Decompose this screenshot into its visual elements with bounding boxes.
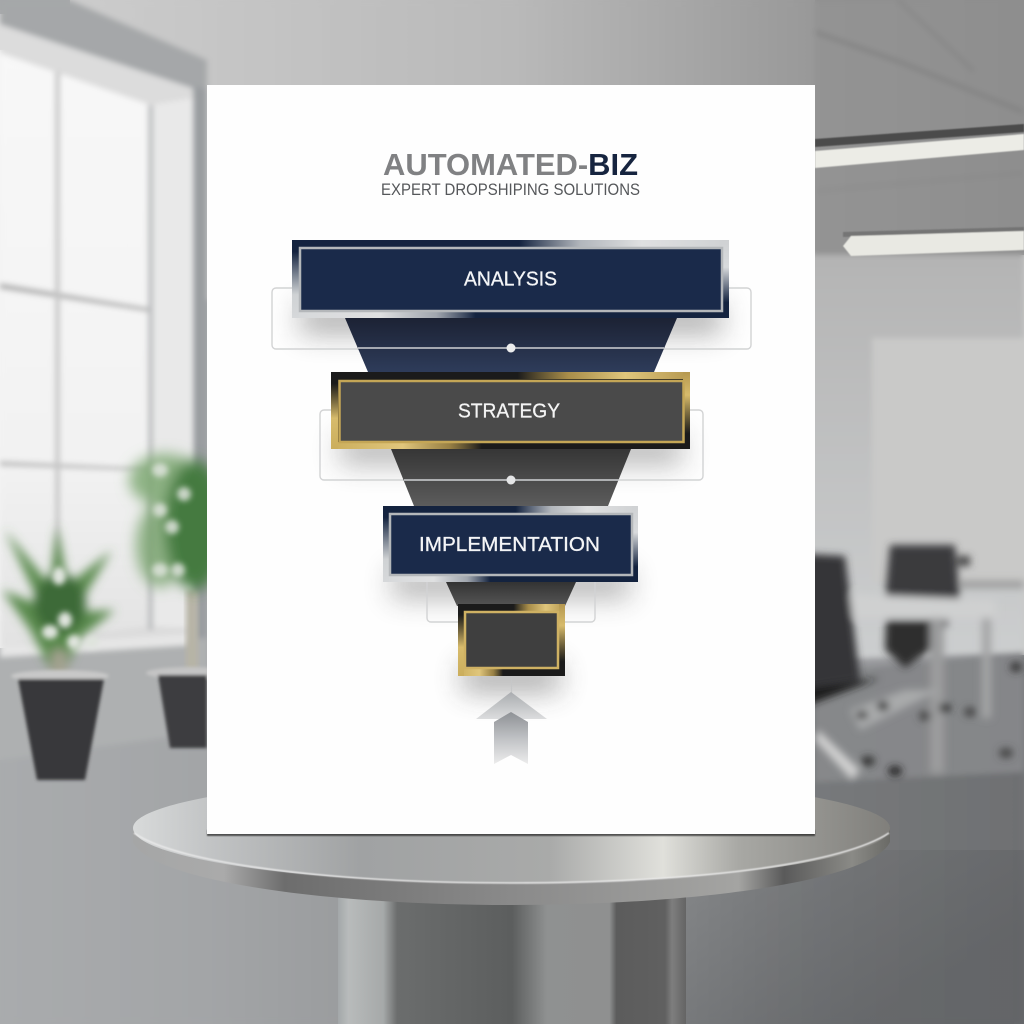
bar drop shadow 1 [300,304,722,334]
bar drop shadow 2 [340,436,682,464]
upward arrow icon [476,676,547,764]
stage: implementation: IMPLEMENTATION [419,534,600,556]
funnel segment 1 [345,318,677,372]
stage: strategy [331,372,690,449]
ceiling light strips [815,124,1024,256]
round metal table [133,776,890,1024]
table column [338,890,686,1024]
floor shading [686,850,1024,1024]
stage: analysis [292,240,729,318]
bar drop shadow 3 [392,570,630,598]
funnel segment 3 [446,582,576,606]
funnel segment 2 [391,449,631,506]
stage: analysis: ANALYSIS [464,268,557,290]
connector bracket 3 [427,570,595,622]
subtitle: EXPERT DROPSHIPING SOLUTIONS [381,181,640,199]
connector bracket 1 [272,288,751,349]
table rim [133,826,890,905]
pot right [146,667,234,748]
pot left [11,670,109,780]
title: brand name: AUTOMATED-BIZ [383,147,638,182]
poster panel [207,85,815,836]
office desk and chairs [790,545,1024,780]
connector bracket 2 [320,410,703,480]
box and arrow drop shadow [462,664,560,692]
stage: final blank box [458,604,565,676]
plant right [129,454,225,672]
plant left [2,525,115,678]
stage: implementation [383,506,638,582]
table top surface [133,776,890,883]
stage: strategy: STRATEGY [458,400,560,422]
